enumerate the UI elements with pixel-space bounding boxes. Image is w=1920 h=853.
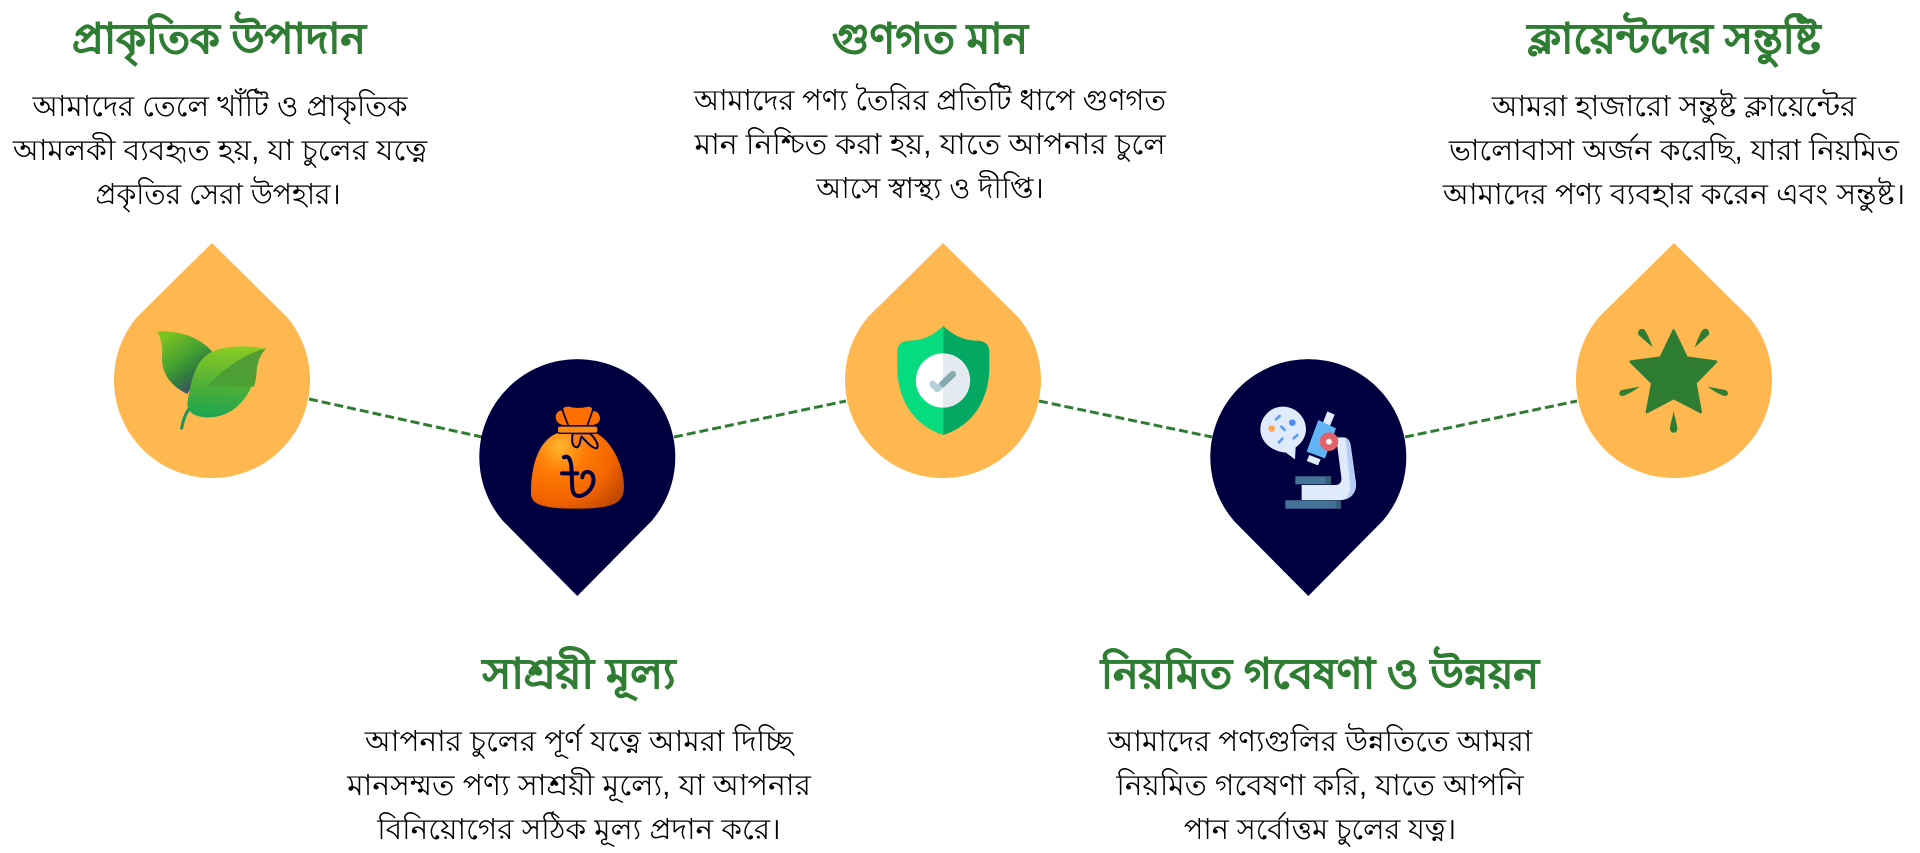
text: research and development: নিয়মিত গবেষণা করি, যাতে আপনি: [1116, 770, 1524, 802]
text: natural ingredients: প্রকৃতির সেরা উপহার।: [95, 179, 341, 211]
icon: shield with check: [897, 326, 989, 435]
icon: microscope and bacteria bubble: [1260, 407, 1356, 509]
text: natural ingredients: আমলকী ব্যবহৃত হয়, যা চুলের যত্নে: [13, 135, 427, 167]
text: client satisfaction: আমাদের পণ্য ব্যবহার করেন এবং সন্তুষ্ট।: [1443, 179, 1905, 211]
text: affordable price: মানসম্মত পণ্য সাশ্রয়ী মূল্যে, যা আপনার: [347, 770, 811, 802]
text: client satisfaction: ভালোবাসা অর্জন করেছি, যারা নিয়মিত: [1449, 135, 1899, 167]
text: affordable price: আপনার চুলের পূর্ণ যত্নে আমরা দিচ্ছি: [365, 726, 793, 758]
pin: research: [1210, 359, 1406, 596]
text: quality: [694, 82, 1166, 205]
text: client satisfaction: আমরা হাজারো সন্তুষ্ট ক্লায়েন্টের: [1492, 91, 1856, 123]
text: affordable price: বিনিয়োগের সঠিক মূল্য প্রদান করে।: [377, 814, 781, 846]
drop: natural ingredients: [114, 243, 310, 478]
text: affordable price: [346, 724, 812, 847]
drop: quality: [845, 243, 1041, 478]
heading: quality: গুণগত মান: [832, 15, 1028, 62]
connector: step 3 to 4: [1039, 401, 1212, 437]
heading: client satisfaction: ক্লায়েন্টদের সন্তুষ্টি: [1527, 15, 1821, 62]
icon: money bag with taka sign: [531, 407, 624, 509]
connector: step 1 to 2: [309, 399, 482, 437]
text: quality: আমাদের পণ্য তৈরির প্রতিটি ধাপে গুণগত: [694, 85, 1166, 117]
text: quality: মান নিশ্চিত করা হয়, যাতে আপনার চুলে: [694, 129, 1166, 161]
text: quality: আসে স্বাস্থ্য ও দীপ্তি।: [816, 173, 1044, 205]
icon: leaves: [157, 331, 266, 428]
connector: step 4 to 5: [1405, 401, 1577, 437]
icon: star with rays: [1619, 329, 1728, 433]
text: natural ingredients: আমাদের তেলে খাঁটি ও প্রাকৃতিক: [33, 91, 407, 123]
text: client satisfaction: [1442, 89, 1905, 213]
drop: client satisfaction: [1576, 243, 1772, 478]
text: research and development: পান সর্বোত্তম চুলের যত্ন।: [1184, 814, 1456, 846]
heading: affordable price: সাশ্রয়ী মূল্য: [482, 650, 676, 697]
text: research and development: [1107, 723, 1533, 847]
text: natural ingredients: [12, 88, 428, 212]
heading: natural ingredients: প্রাকৃতিক উপাদান: [72, 15, 366, 62]
text: research and development: আমাদের পণ্যগুলির উন্নতিতে আমরা: [1108, 726, 1532, 758]
heading: research and development: নিয়মিত গবেষণা ও উন্নয়ন: [1101, 650, 1539, 697]
connector: step 2 to 3: [674, 401, 846, 437]
pin: affordable price: [479, 359, 675, 596]
